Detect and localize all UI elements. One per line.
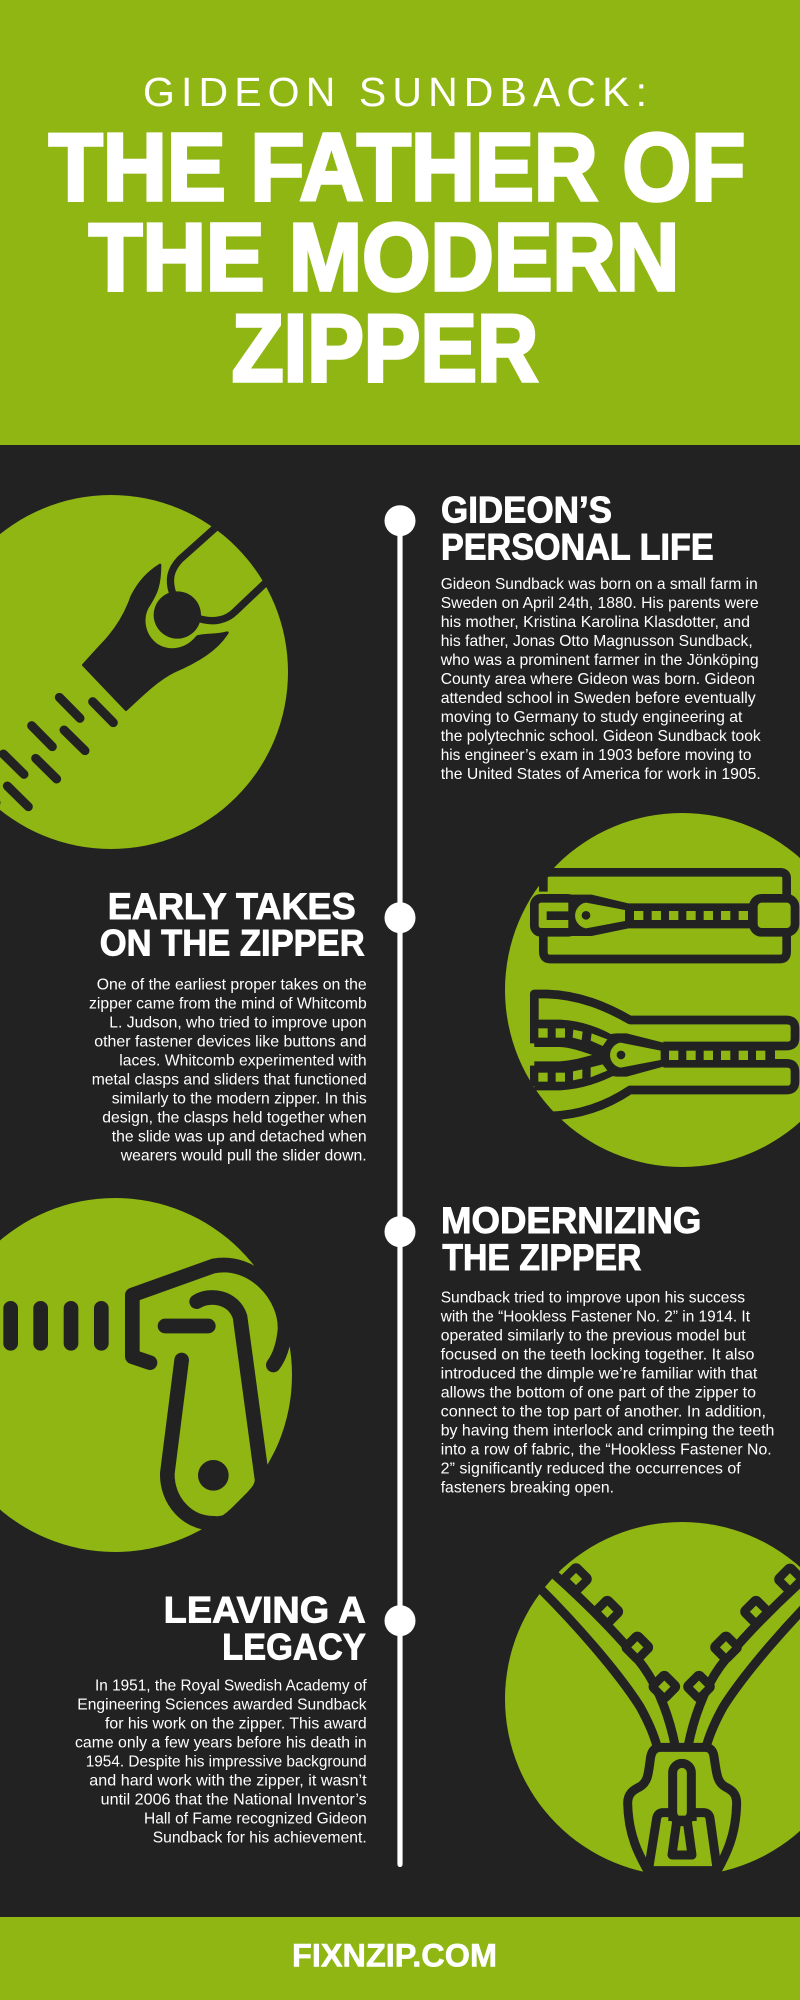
section: Gideon's personal life [440,490,762,783]
heading [441,1200,701,1278]
icon: open zipper in circle [505,1522,800,1876]
heading: MODERNIZING [441,1200,701,1241]
body text: similarly to the modern zipper. In this [112,1090,367,1108]
body text: zipper came from the mind of Whitcomb [89,995,367,1012]
heading: THE ZIPPER [442,1237,641,1278]
body text: Hall of Fame recognized Gideon [144,1810,367,1827]
open zipper tape [534,994,795,1046]
body text: allows the bottom of one part of the zipper to [441,1384,756,1401]
body text: Sundback for his achievement. [153,1829,367,1846]
body text: the polytechnic school. Gideon Sundback took [441,728,762,745]
body text: the United States of America for work in 1905. [441,766,761,783]
body text [440,1289,774,1496]
title: THE MODERN [89,204,679,311]
body text: until 2006 that the National Inventor’s [101,1791,367,1808]
body text: operated similarly to the previous model but [441,1327,746,1344]
heading: PERSONAL LIFE [441,526,714,567]
body text: Sundback tried to improve upon his success [441,1289,745,1306]
heading [164,1589,366,1668]
heading: ON THE ZIPPER [100,923,365,964]
slider body [628,1747,737,1872]
right tape [707,1590,800,1745]
body text: introduced the dimple we’re familiar with that [441,1365,758,1382]
timeline [384,505,416,1867]
body text: by having them interlock and crimping the teeth [441,1422,774,1439]
body text: his mother, Kristina Karolina Klasdotter, and [441,614,750,631]
body text: laces. Whitcomb experimented with [119,1052,367,1070]
body text: fasteners breaking open. [441,1479,614,1496]
heading [441,490,714,567]
section: Modernizing the zipper [440,1200,774,1496]
body text: who was a prominent farmer in the Jönköping [440,652,759,669]
icon: zipper slider in circle [0,495,288,849]
section: Leaving a legacy [75,1589,368,1846]
closed zipper tape [543,872,787,897]
body text: Sweden on April 24th, 1880. His parents were [441,595,759,612]
heading: GIDEON’S [441,490,612,531]
body text [75,1677,368,1846]
heading [100,886,365,964]
body text [89,976,367,1165]
body text: the slide was up and detached when [112,1129,367,1146]
body text: and hard work with the zipper, it wasn’t [89,1772,367,1789]
teeth [564,1567,800,1699]
body text: other fastener devices like buttons and [94,1033,367,1050]
body text: L. Judson, who tried to improve upon [109,1014,367,1031]
body text: Engineering Sciences awarded Sundback [77,1696,368,1713]
body text: Gideon Sundback was born on a small farm in [441,576,758,593]
body text: into a row of fabric, the “Hookless Fastener No. [441,1441,772,1458]
body text: connect to the top part of another. In addition, [441,1403,766,1420]
heading: LEGACY [222,1627,366,1668]
body text: design, the clasps held together when [102,1110,367,1127]
title: ZIPPER [232,295,538,402]
body text: County area where Gideon was born. Gideon [441,671,755,688]
footer banner [0,1917,800,2000]
icon: two zippers in circle [505,813,800,1167]
body text: focused on the teeth locking together. It also [441,1346,754,1363]
body text: for his work on the zipper. This award [105,1715,367,1732]
body text: attended school in Sweden before eventually [441,690,756,707]
body text: with the “Hookless Fastener No. 2” in 1914. It [440,1308,751,1325]
heading: EARLY TAKES [108,886,356,927]
body text: In 1951, the Royal Swedish Academy of [95,1677,367,1694]
body text: came only a few years before his death in [75,1734,367,1751]
left tape [542,1590,657,1745]
icon: zipper pull tab in circle [0,1198,300,1552]
body text [440,576,762,783]
body text: his engineer’s exam in 1903 before moving to [441,747,751,764]
body text: 1954. Despite his impressive background [86,1753,367,1770]
title [49,114,745,402]
subtitle: GIDEON SUNDBACK: [143,69,647,115]
footer website: FIXNZIP.COM [292,1937,497,1973]
heading: LEAVING A [164,1589,366,1630]
header banner [0,0,800,445]
body text: metal clasps and sliders that functioned [92,1072,367,1088]
body text: 2” significantly reduced the occurrences of [441,1460,741,1477]
body text: wearers would pull the slider down. [120,1148,367,1165]
section: Early takes on the zipper [89,886,367,1165]
title: THE FATHER OF [49,114,745,221]
body text: his father, Jonas Otto Magnusson Sundback, [441,633,753,650]
body text: One of the earliest proper takes on the [97,976,367,993]
body text: moving to Germany to study engineering at [441,709,743,726]
pull tab [648,1813,717,1871]
